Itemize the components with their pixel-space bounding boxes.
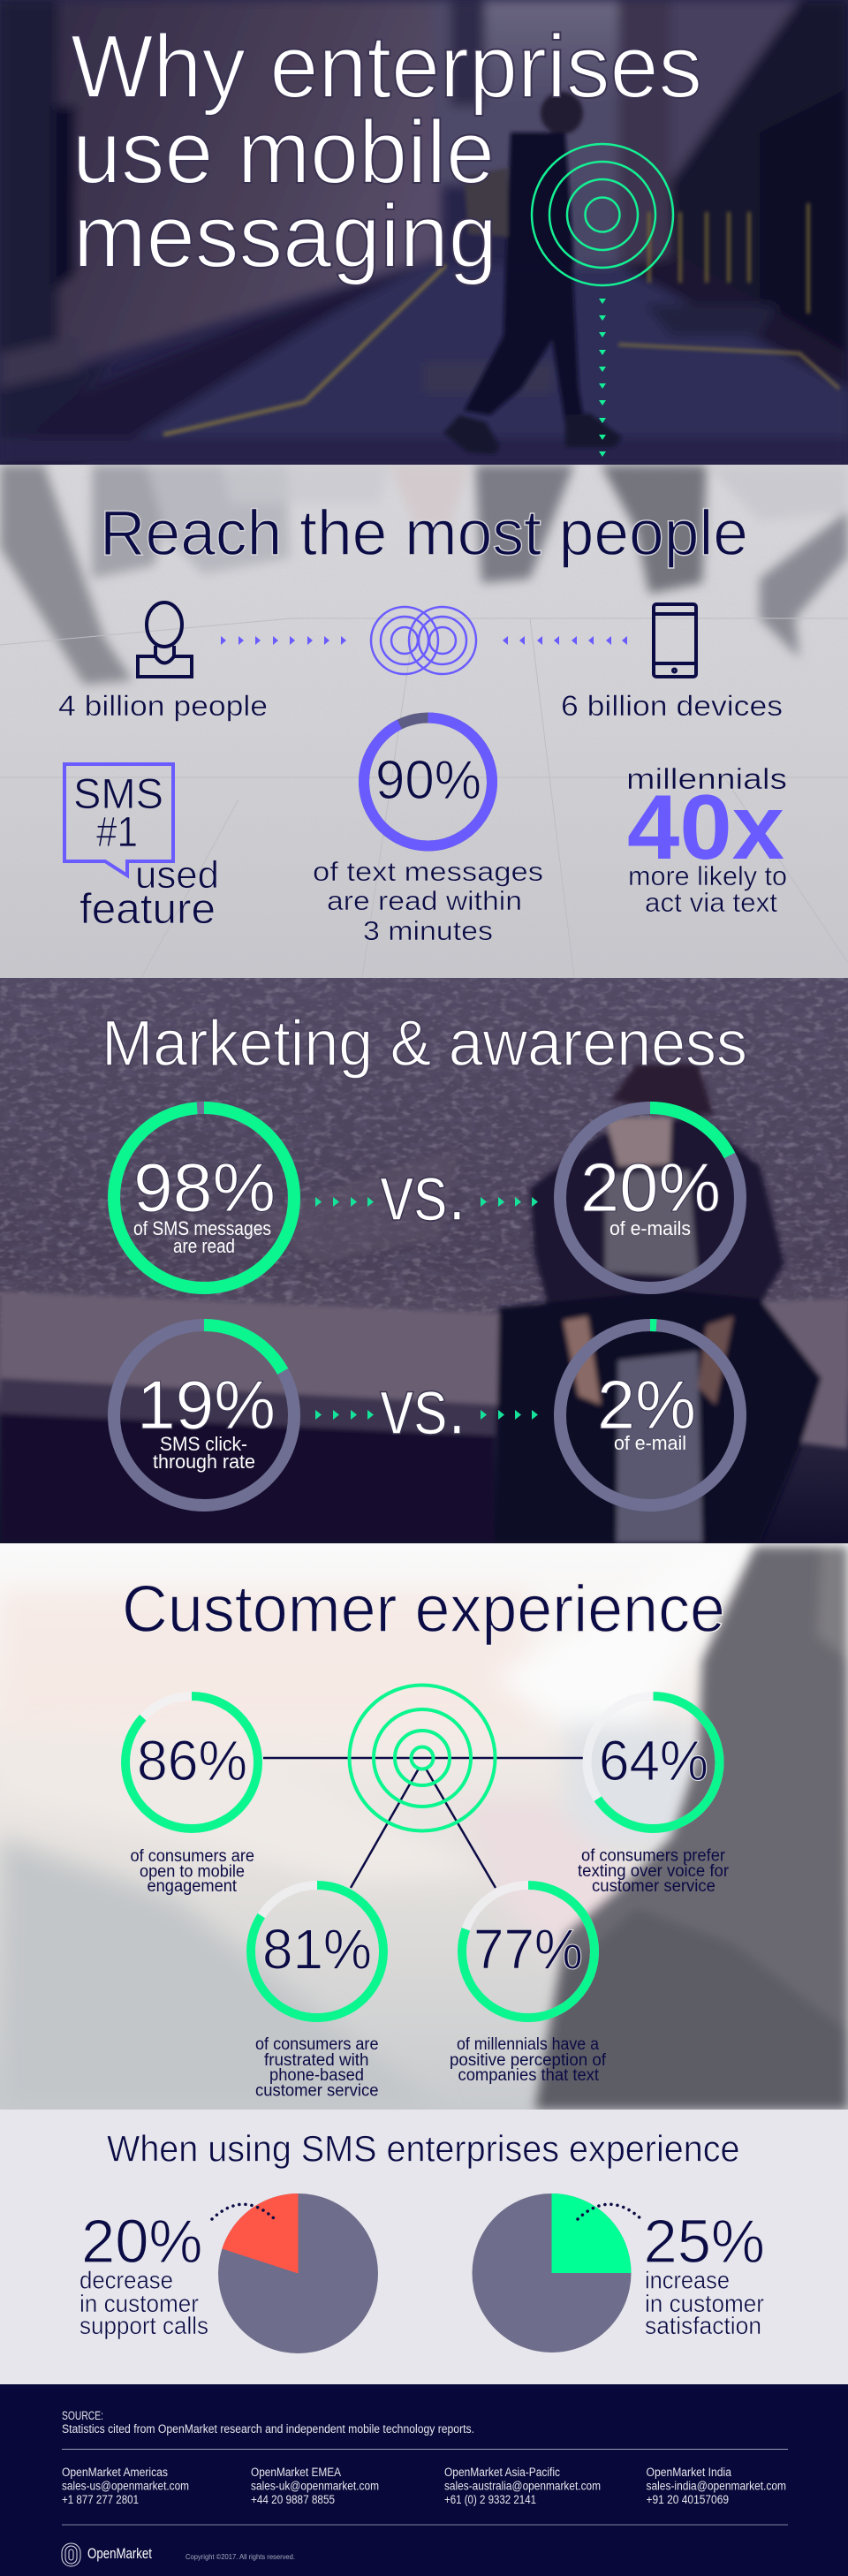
text: 77 percent caption: of millennials have a — [457, 2035, 599, 2054]
arrow: row one left — [315, 1197, 374, 1207]
label: 6 billion devices: 6 billion devices — [561, 690, 783, 722]
chart: 98 percent ring: are read — [173, 1235, 235, 1257]
arrow: dotted downward arrows — [599, 299, 606, 457]
title: use mobile — [72, 103, 495, 202]
stat: 20 percent decrease: in customer — [80, 2290, 199, 2317]
text: 64 percent caption: of consumers prefer — [581, 1846, 726, 1866]
heading: When using SMS enterprises experience — [107, 2127, 740, 2170]
text: 81 percent caption: customer service — [255, 2081, 378, 2101]
panel: when using SMS — [0, 2110, 848, 2384]
text: 64 percent caption: texting over voice for — [578, 1862, 730, 1881]
walking man silhouette — [443, 92, 622, 454]
heading: Reach the most people — [100, 498, 748, 569]
text: 64 percent caption — [578, 1846, 730, 1896]
contact: Americas: sales-us@openmarket.com — [62, 2479, 189, 2493]
chart: 25 percent pie — [472, 2193, 642, 2352]
chart: 2 percent ring — [560, 1325, 740, 1505]
contact: EMEA — [251, 2466, 379, 2506]
logo: OpenMarket — [62, 2543, 152, 2566]
text: 81 percent caption: phone-based — [269, 2066, 364, 2085]
heading: Customer experience — [122, 1572, 725, 1646]
arrow: row two right — [481, 1410, 538, 1420]
chart: 2 percent ring: 2% — [597, 1366, 696, 1443]
source note: SOURCE: — [62, 2409, 103, 2422]
contact: Asia-Pacific: sales-australia@openmarket.com — [444, 2479, 601, 2493]
text: 77 percent caption: companies that text — [458, 2066, 600, 2085]
bubble text — [76, 779, 216, 924]
label: 4 billion people: 4 billion people — [58, 690, 268, 722]
panel: hero — [0, 0, 848, 465]
chart: 86 percent ring — [125, 1696, 258, 1829]
panel: marketing and awareness — [0, 978, 848, 1543]
icon: concentric signal rings — [532, 144, 673, 285]
stat: millennials 40x: act via text — [645, 887, 777, 918]
chart: 86 percent ring: 86% — [137, 1729, 247, 1792]
hero background photo: alley with pedestrian — [0, 0, 848, 465]
text: 81 percent caption: frustrated with — [264, 2051, 369, 2070]
text: 81 percent caption: of consumers are — [255, 2035, 378, 2054]
text: 86 percent caption: engagement — [147, 1877, 238, 1896]
text: 90 percent caption: of text messages — [313, 856, 543, 887]
contact: EMEA: +44 20 9887 8855 — [251, 2493, 335, 2506]
chart: 20 percent ring — [560, 1108, 740, 1288]
stat: 25 percent increase — [643, 2207, 765, 2339]
chart: 64 percent ring: 64% — [599, 1729, 708, 1792]
title: Why enterprises — [71, 18, 702, 117]
text: 77 percent caption: positive perception of — [450, 2051, 607, 2070]
stat: 20 percent decrease: 20% — [81, 2207, 203, 2276]
yellow road lines and bollards — [163, 203, 839, 435]
arrow: row one right — [481, 1197, 538, 1207]
icon: overlapping rings — [371, 607, 476, 674]
chart: 64 percent ring — [587, 1696, 719, 1829]
chart: 19 percent ring — [114, 1325, 294, 1505]
text: vs row two: vs. — [380, 1363, 466, 1451]
text: vs row one: vs. — [380, 1149, 466, 1238]
text: 86 percent caption: open to mobile — [140, 1862, 245, 1882]
stat: 25 percent increase: in customer — [645, 2290, 764, 2317]
heading: Marketing & awareness — [102, 1008, 747, 1080]
source note — [62, 2409, 474, 2436]
stat: 20 percent decrease — [80, 2207, 208, 2339]
chart: 19 percent ring: SMS click- — [160, 1433, 247, 1455]
contact: India: sales-india@openmarket.com — [647, 2479, 786, 2493]
chart: 20 percent ring: of e-mails — [610, 1217, 691, 1239]
bubble text: used — [135, 853, 219, 897]
chart: 81 percent ring — [251, 1885, 383, 2018]
customer background photo: woman texting — [0, 1543, 848, 2110]
marketing background photo: man seated on a wall — [0, 978, 848, 1543]
icon: speech bubble — [64, 764, 173, 875]
copyright: Copyright ©2017. All rights reserved. — [186, 2553, 295, 2561]
icon: central target rings with connectors — [263, 1686, 583, 1888]
chart: 90 percent ring: 90% — [375, 750, 481, 811]
callout: SMS number one speech bubble — [64, 764, 219, 933]
text: 86 percent caption — [131, 1847, 254, 1896]
panel: customer experience — [0, 1543, 848, 2110]
text: 64 percent caption: customer service — [592, 1877, 716, 1896]
chart: 98 percent ring: of SMS messages — [133, 1217, 271, 1239]
contact: India: OpenMarket India — [647, 2466, 731, 2479]
logo: OpenMarket: OpenMarket — [87, 2545, 152, 2562]
text: 77 percent caption — [450, 2035, 607, 2085]
contact: Americas: +1 877 277 2801 — [62, 2493, 139, 2506]
arrow: toward rings from phone — [503, 636, 627, 645]
bubble text: SMS — [73, 771, 163, 818]
title — [71, 18, 702, 286]
stat: millennials 40x: more likely to — [628, 860, 787, 891]
bubble text: #1 — [96, 809, 138, 856]
title: messaging — [73, 187, 497, 286]
text: 90 percent caption: are read within — [327, 885, 522, 916]
contact: Asia-Pacific: OpenMarket Asia-Pacific — [444, 2466, 560, 2479]
chart: 77 percent ring: 77% — [473, 1917, 583, 1981]
arrow: toward rings from person — [221, 636, 346, 645]
stat: 25 percent increase: increase — [645, 2267, 730, 2293]
stat: millennials 40x — [626, 762, 787, 918]
icon: person — [138, 602, 192, 677]
chart: 98 percent ring — [114, 1108, 294, 1288]
chart: 20 percent ring: 20% — [580, 1148, 721, 1226]
stat: 20 percent decrease: support calls — [80, 2312, 208, 2339]
contact: India — [647, 2466, 786, 2506]
icon: phone — [654, 604, 696, 677]
text: 81 percent caption — [255, 2035, 378, 2101]
stat: 20 percent decrease: decrease — [80, 2267, 173, 2293]
contact: Americas — [62, 2466, 189, 2506]
bubble text: feature — [80, 886, 216, 933]
chart: 19 percent ring: 19% — [137, 1366, 276, 1443]
seated man silhouette — [611, 1064, 714, 1115]
contact: Asia-Pacific: +61 (0) 2 9332 2141 — [444, 2493, 536, 2506]
source note: Statistics cited from OpenMarket research and independent mobile technology reports. — [62, 2422, 474, 2436]
chart: 90 percent ring — [364, 717, 492, 846]
contact: EMEA: sales-uk@openmarket.com — [251, 2479, 379, 2493]
text: 86 percent caption: of consumers are — [131, 1847, 254, 1866]
reach background photo: pavement with walking legs — [0, 465, 848, 978]
contact: India: +91 20 40157069 — [647, 2493, 729, 2506]
chart: 77 percent ring — [462, 1885, 594, 2018]
stat: 25 percent increase: 25% — [643, 2207, 765, 2276]
contact: EMEA: OpenMarket EMEA — [251, 2466, 341, 2479]
stat: millennials 40x: millennials — [626, 762, 787, 795]
chart: 19 percent ring: through rate — [153, 1451, 255, 1473]
chart: 2 percent ring: of e-mail — [614, 1432, 686, 1454]
text: 90 percent caption — [314, 861, 542, 940]
chart: 98 percent ring: 98% — [133, 1148, 276, 1226]
text: 90 percent caption: 3 minutes — [363, 915, 493, 946]
chart: 20 percent pie — [212, 2193, 378, 2353]
chart: 81 percent ring: 81% — [262, 1917, 372, 1981]
arrow: row two left — [315, 1410, 374, 1420]
stat: 25 percent increase: satisfaction — [645, 2312, 761, 2339]
contact: Asia-Pacific — [444, 2466, 601, 2506]
contact: Americas: OpenMarket Americas — [62, 2466, 168, 2479]
panel: footer — [0, 2384, 848, 2576]
stat: millennials 40x: 40x — [627, 777, 784, 879]
panel: reach the most people — [0, 465, 848, 978]
